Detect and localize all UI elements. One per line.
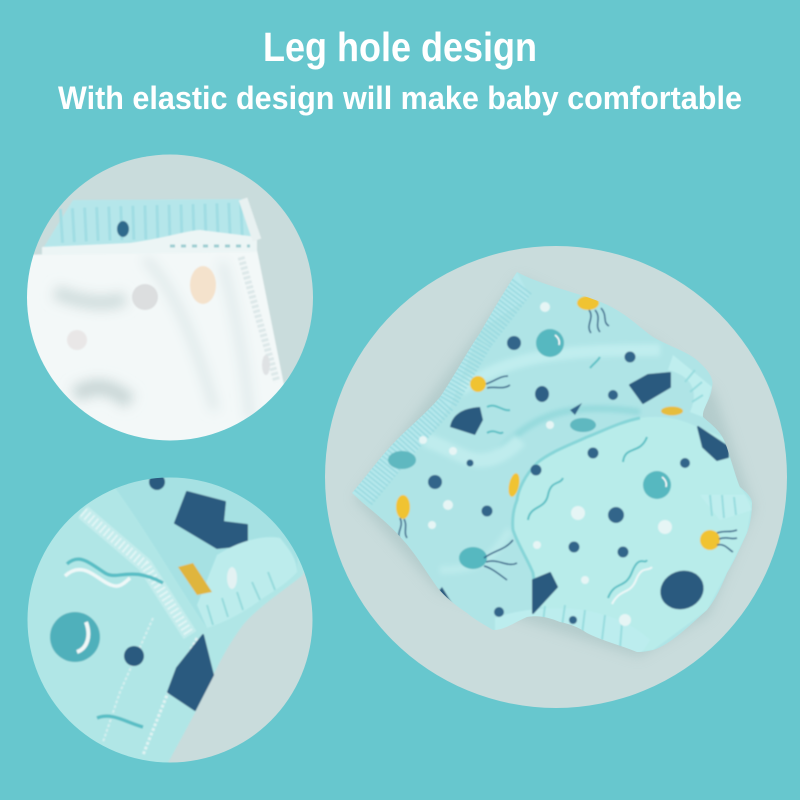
panel: full training pants photo [325, 246, 787, 708]
elastic waistband [42, 199, 257, 250]
waistband [352, 272, 530, 503]
teal jellyfish [459, 547, 487, 569]
faint print dots [132, 284, 158, 310]
white dots [419, 302, 672, 626]
inner folds [425, 350, 660, 570]
inner back fabric [116, 478, 297, 620]
training pants [340, 260, 760, 660]
right side stitching [241, 257, 277, 382]
panel: leg elastic detail photo [28, 478, 312, 762]
jellyfish tentacles [399, 308, 737, 580]
beige spot [190, 266, 216, 304]
navy blob upper [175, 492, 247, 548]
stitched seam [83, 512, 190, 635]
fabric area [28, 488, 304, 762]
waves [67, 559, 163, 583]
gathered leg elastic [197, 537, 297, 628]
panel: waistband detail photo [27, 154, 313, 440]
navy dots [507, 336, 521, 350]
white inner fabric [27, 252, 284, 440]
fabric folds [55, 258, 250, 420]
top right elastic [668, 355, 712, 417]
navy print mark [117, 221, 129, 237]
right leg elastic [700, 495, 752, 520]
white stitched band [42, 230, 257, 255]
navy shapes [630, 373, 670, 403]
front panel seam [513, 418, 640, 603]
title: Leg hole design [263, 24, 537, 70]
bottom leg elastic [496, 609, 640, 652]
subtitle: With elastic design will make baby comfortable [58, 80, 742, 116]
waves [487, 357, 647, 598]
yellow jellyfish [178, 563, 212, 595]
pants shadow [354, 277, 754, 657]
front panel [513, 417, 752, 652]
bubble highlight [77, 622, 88, 652]
navy blob lower [168, 635, 213, 710]
yellow jellyfish [577, 296, 599, 310]
teal bubbles [536, 329, 564, 357]
bubble [50, 612, 100, 662]
navy dots [124, 646, 144, 666]
